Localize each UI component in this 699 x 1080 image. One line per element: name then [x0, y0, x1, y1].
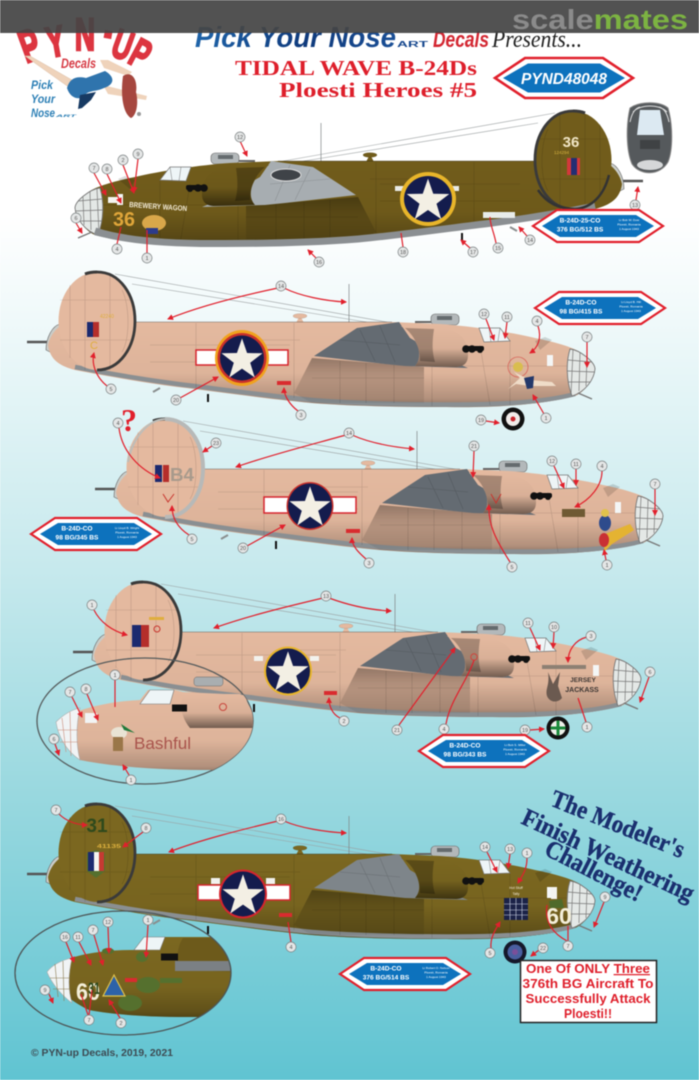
callouts: 14 [527, 238, 533, 244]
callouts: 1 [525, 851, 529, 857]
callouts: 18 [400, 250, 406, 256]
inset callouts: 7 [91, 928, 95, 934]
callouts: 7 [653, 482, 657, 488]
wheel decal [546, 716, 570, 740]
callouts: 4 [442, 727, 446, 733]
callouts: 13 [323, 594, 329, 600]
inset callouts: 1 [113, 673, 117, 679]
aircraft 5: olive B-24D 376th BG: 41135 [97, 844, 121, 850]
aircraft 4: tan B-24D Jersey Jackass: JACKASS [565, 687, 599, 694]
callouts: 1 [90, 603, 94, 609]
logo: PYN-up Decals [12, 5, 158, 120]
type label: B-24D-CO 376 BG/514 BS: 376 BG/514 BS [363, 974, 410, 982]
callouts: 9 [603, 895, 607, 901]
aircraft 1: olive B-24D Brewery Wagon [71, 111, 643, 267]
inset: rear view of tail turret [627, 103, 672, 173]
inset callouts: 16 [62, 935, 68, 941]
title line: Pick Your Nose Art Decals Presents: ART [397, 40, 428, 49]
type label: B-24D-25-CO 376 BG/512 BS [533, 210, 663, 242]
callouts: 12 [237, 135, 243, 141]
logo: PYN-up Decals: N [75, 9, 95, 60]
fin markings [132, 625, 141, 647]
callouts: 11 [573, 462, 579, 468]
aircraft 2: tan B-24D with pin-up [27, 272, 595, 430]
type label: B-24D-CO 98 BG/345 BS: Lt Lloyd B. Wright [115, 526, 139, 530]
inset nose art: 60 [76, 979, 100, 1006]
wing roundel [271, 169, 301, 181]
callouts: 6 [648, 670, 652, 676]
callouts: 5 [510, 565, 514, 571]
inset callouts: 12 [105, 920, 111, 926]
callout box: One Of Only Three: 376th BG Aircraft To [522, 977, 654, 991]
callouts: 8 [105, 167, 109, 173]
callout box: One Of Only Three: Ploesti!! [564, 1007, 612, 1021]
callouts: 8 [144, 826, 148, 832]
heading: TIDAL WAVE B-24Ds Ploesti Heroes #5 [235, 56, 477, 102]
callouts: 12 [481, 312, 487, 318]
inset camouflage patches [102, 948, 182, 1011]
wheel decal [502, 408, 524, 430]
callouts: 16 [278, 817, 284, 823]
callouts [71, 132, 640, 267]
nose art: 60 and bomb tally: Hot Stuff [509, 886, 523, 890]
inset callouts [49, 670, 136, 785]
type label: B-24D-CO 376 BG/514 BS: B-24D-CO [370, 966, 402, 972]
type label: B-24D-25-CO 376 BG/512 BS: Lt Bob W. Dow [619, 218, 640, 222]
type label: B-24D-CO 98 BG/343 BS: Ploesti, Romania [503, 748, 527, 752]
aircraft 2: tan B-24D with pin-up: C [90, 340, 98, 352]
callouts: 14 [346, 431, 352, 437]
callouts [93, 281, 592, 425]
inset airframe clipped to oval [76, 690, 254, 771]
title line: Pick Your Nose Art Decals Presents: Decals [433, 27, 489, 52]
callouts: 3 [299, 413, 303, 419]
watermark: scalemates: scale mates [512, 4, 688, 35]
heading: TIDAL WAVE B-24Ds Ploesti Heroes #5: TIDAL WAVE B-24Ds [235, 56, 477, 80]
title line: Pick Your Nose Art Decals Presents: Presents... [491, 27, 582, 53]
callout box: One Of Only Three: One Of ONLY Three [526, 962, 650, 976]
inset callouts [40, 915, 153, 1028]
badge: PYND48048: PYND48048 [521, 71, 607, 88]
logo: PYN-up Decals: P [12, 18, 47, 72]
callouts: 21 [471, 444, 477, 450]
nose art: pin-up [508, 357, 528, 377]
callouts: 16 [316, 260, 322, 266]
type label: B-24D-CO 98 BG/345 BS: B-24D-CO [61, 526, 93, 532]
copyright: © PYN-up Decals, 2019, 2021 [31, 1048, 173, 1059]
callouts: 19 [522, 728, 528, 734]
callouts [113, 418, 660, 572]
type label: B-24D-CO 376 BG/514 BS: Ploesti, Romania [424, 970, 448, 974]
inset callouts: 9 [43, 988, 47, 994]
callouts: 5 [488, 951, 492, 957]
aircraft 4: tan B-24D Jersey Jackass [73, 582, 655, 740]
nose art: Jersey Jackass [542, 665, 586, 669]
callouts: 4 [600, 464, 604, 470]
callouts: 14 [482, 845, 488, 851]
callouts: 22 [540, 946, 546, 952]
slogan: The Modeler's Finish Weathering Challenge: Challenge! [540, 835, 647, 907]
heading: TIDAL WAVE B-24Ds Ploesti Heroes #5: Ploesti Heroes #5 [279, 78, 477, 102]
callouts: 1 [585, 725, 589, 731]
aircraft 1: olive B-24D Brewery Wagon: 36 [113, 209, 135, 231]
aircraft 5: olive B-24D 376th BG [27, 804, 610, 964]
inset callouts: 7 [87, 1018, 91, 1024]
callouts: 1 [145, 256, 149, 262]
callouts: 15 [495, 246, 501, 252]
aircraft 1: olive B-24D Brewery Wagon: 124294 [554, 150, 570, 155]
mission tally [562, 509, 585, 517]
slogan: The Modeler's Finish Weathering Challenge: The Modeler's [547, 786, 689, 864]
nose art: duck with bomb [599, 515, 611, 531]
type label: B-24D-CO 98 BG/345 BS [31, 518, 161, 550]
inset oval: Bashful nose art variant: Bashful [134, 734, 191, 753]
inset oval: nose art variant [15, 911, 240, 1035]
callouts: 13 [632, 203, 638, 209]
logo: PYN-up Decals: Nose [31, 106, 55, 120]
callout box: One Of Only Three [520, 960, 656, 1022]
type label: B-24D-CO 98 BG/415 BS: 1 August 1943 [621, 309, 641, 313]
fin edge and markings [165, 419, 203, 517]
type label: B-24D-CO 376 BG/514 BS [340, 958, 470, 990]
callouts: 7 [585, 335, 589, 341]
callouts: 4 [116, 421, 120, 427]
callouts: 19 [478, 418, 484, 424]
aircraft 3: tan B-24D with duck nose art [95, 402, 663, 572]
fuselage roundel [264, 497, 356, 513]
logo: PYN-up Decals: Your [31, 92, 56, 106]
logo: PYN-up Decals: ART [54, 113, 77, 118]
logo: PYN-up Decals: Y [42, 17, 69, 67]
aircraft 4: tan B-24D Jersey Jackass: JERSEY [570, 677, 596, 684]
callout box: One Of Only Three: Successfully Attack [526, 992, 651, 1006]
inset callouts: 1 [146, 918, 150, 924]
inset callouts: 8 [84, 687, 88, 693]
logo: PYN-up Decals: Pick [31, 78, 54, 92]
callouts [51, 805, 610, 958]
inset callouts: 7 [68, 690, 72, 696]
nose art: Brewery Wagon: BREWERY WAGON [129, 200, 187, 213]
callouts: 12 [549, 459, 555, 465]
inset airframe clipped to oval [68, 936, 232, 1018]
fuselage roundel [198, 885, 290, 900]
aircraft 5: olive B-24D 376th BG: Tally [512, 892, 520, 896]
callouts: 5 [109, 387, 113, 393]
callouts: 11 [525, 621, 531, 627]
inset cockpit [134, 937, 165, 950]
logo: PYN-up Decals: P [122, 30, 158, 78]
inset callouts: 2 [119, 1021, 123, 1027]
type label: B-24D-CO 98 BG/415 BS: B-24D-CO [565, 300, 597, 306]
callouts: 2 [121, 158, 125, 164]
title line: Pick Your Nose Art Decals Presents [195, 22, 582, 54]
callouts: 13 [507, 847, 513, 853]
type label: B-24D-CO 98 BG/343 BS: 98 BG/343 BS [444, 752, 487, 758]
type label: B-24D-CO 98 BG/345 BS: Ploesti, Romania [115, 530, 139, 534]
fuselage roundel [395, 186, 459, 191]
callouts: 20 [240, 546, 246, 552]
title line: Pick Your Nose Art Decals Presents: Pick Your Nose [195, 22, 396, 54]
type label: B-24D-CO 98 BG/345 BS: 98 BG/345 BS [56, 534, 99, 542]
callouts: 11 [504, 315, 510, 321]
type label: B-24D-CO 98 BG/415 BS: Lt Lloyd B. Hill [621, 300, 641, 304]
callouts: 3 [367, 561, 371, 567]
inset callouts: 11 [75, 935, 81, 941]
type label: B-24D-25-CO 376 BG/512 BS: 376 BG/512 BS [557, 226, 604, 234]
type label: B-24D-CO 98 BG/343 BS: Lt Bob S. Miller [505, 743, 525, 747]
callouts: 14 [278, 284, 284, 290]
callouts: 21 [394, 728, 400, 734]
inset oval: nose art variant: 31 [88, 979, 100, 998]
type label: B-24D-CO 98 BG/415 BS: Ploesti, Romania [619, 304, 643, 308]
callouts: 7 [92, 166, 96, 172]
aircraft 5: olive B-24D 376th BG: 60 [546, 903, 572, 929]
fin markings [87, 322, 93, 337]
inset callouts: 1 [129, 778, 133, 784]
callouts: 2 [342, 719, 346, 725]
fin markings: 31 [86, 816, 108, 837]
callouts [87, 591, 655, 735]
inset nose art: dwarf [111, 727, 127, 739]
callouts: 17 [470, 250, 476, 256]
callouts: 6 [74, 216, 78, 222]
type label: B-24D-CO 98 BG/415 BS: 98 BG/415 BS [560, 308, 603, 316]
type label: B-24D-25-CO 376 BG/512 BS: B-24D-25-CO [560, 218, 600, 224]
fuselage roundel [196, 350, 288, 365]
callouts: 7 [54, 808, 58, 814]
logo: PYN-up Decals: - [100, 5, 117, 56]
fin markings: 36 [563, 134, 579, 151]
aircraft 2: tan B-24D with pin-up: 42240 [100, 314, 114, 320]
aircraft 3: tan B-24D with duck nose art: B4 [170, 465, 194, 485]
pin-up figure [25, 56, 72, 88]
type label: B-24D-CO 376 BG/514 BS: Lt Robert O. Nelson [422, 966, 450, 970]
callouts: 23 [213, 441, 219, 447]
badge: PYND48048 [495, 58, 633, 98]
wheel decal [504, 940, 526, 964]
type label: B-24D-25-CO 376 BG/512 BS: 1 August 1943 [619, 227, 639, 231]
callouts: 5 [190, 537, 194, 543]
underside band [95, 206, 595, 244]
callouts: 4 [289, 945, 293, 951]
logo: PYN-up Decals: U [106, 21, 139, 70]
callouts: 1 [605, 563, 609, 569]
callouts: 4 [535, 319, 539, 325]
type label: B-24D-25-CO 376 BG/512 BS: Ploesti, Romania [617, 222, 641, 226]
callouts: 20 [173, 398, 179, 404]
type label: B-24D-CO 376 BG/514 BS: 1 August 1943 [426, 975, 446, 979]
type label: B-24D-CO 98 BG/343 BS [419, 735, 549, 767]
inset oval: Bashful nose art variant [37, 658, 256, 785]
callouts: 1 [544, 416, 548, 422]
type label: B-24D-CO 98 BG/415 BS [535, 292, 665, 324]
type label: B-24D-CO 98 BG/345 BS: 1 August 1943 [117, 535, 137, 539]
callouts: 7 [566, 944, 570, 950]
fuselage roundel [254, 656, 263, 661]
callouts: 3 [589, 634, 593, 640]
callouts: 4 [115, 247, 119, 253]
logo: PYN-up Decals: Decals [61, 55, 96, 71]
callouts: 10 [551, 625, 557, 631]
inset callouts: 6 [52, 737, 56, 743]
type label: B-24D-CO 98 BG/343 BS: B-24D-CO [449, 742, 481, 750]
type label: B-24D-CO 98 BG/343 BS: 1 August 1943 [505, 752, 525, 756]
site header bar [0, 0, 699, 33]
callouts: 9 [136, 152, 140, 158]
question mark: ? [121, 402, 137, 438]
inset cockpit [140, 690, 174, 704]
